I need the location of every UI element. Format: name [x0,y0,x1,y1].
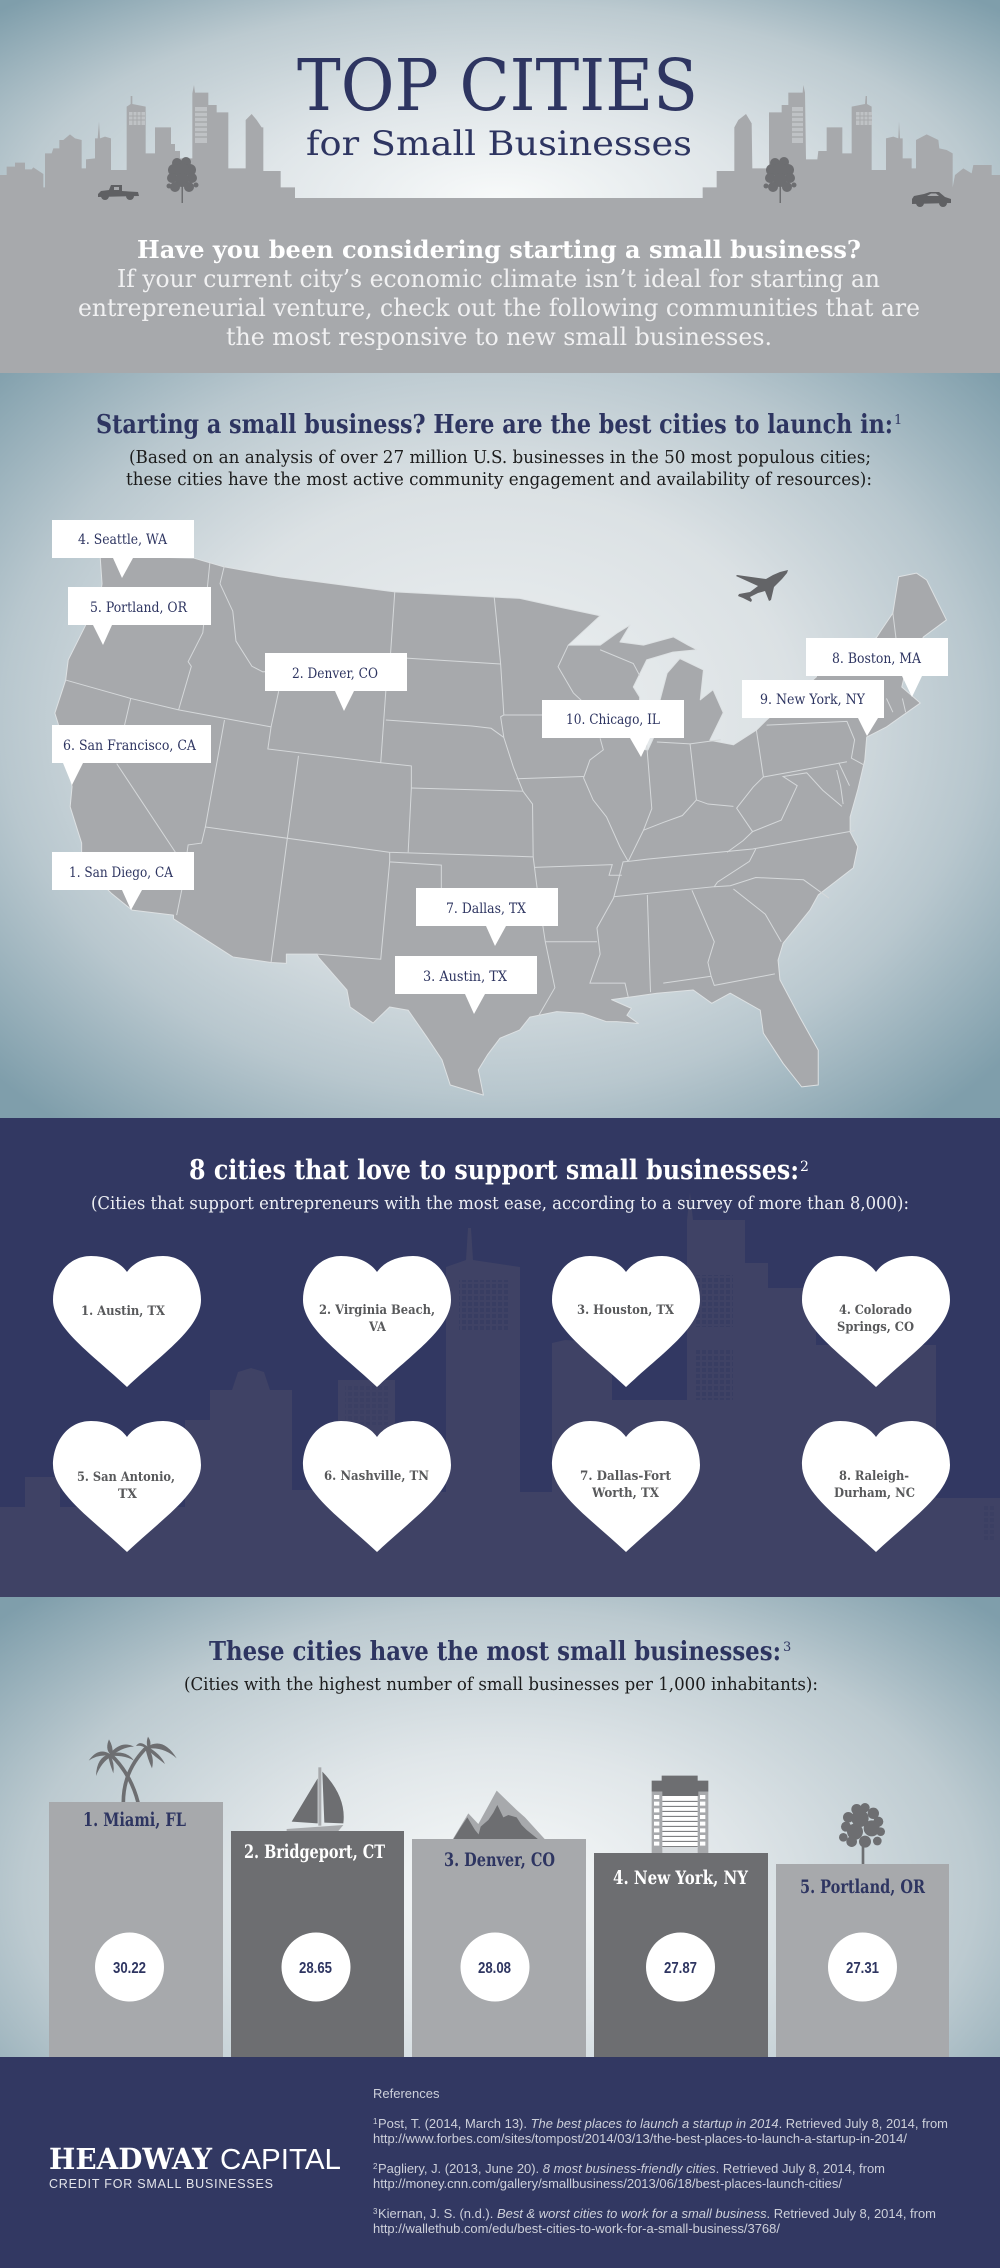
heart: 7. Dallas-Fort Worth: Worth, TX [591,1486,660,1501]
bar: Bridgeport: 2. Bridgeport, CT [244,1841,385,1863]
callout: 4. Seattle: 4. Seattle, WA [78,532,168,548]
reference 2: Pagliery, J. (2013, June 20). 8 most business-friendly cities. Retrieved July 8, 2014, from [378,2161,885,2176]
reference 2 [373,2161,885,2191]
callout: 9. New York: 9. New York, NY [760,692,866,708]
icon: right tree [764,157,796,203]
bar: Portland: 27.31 [846,1960,879,1977]
heart: 3. Houston [552,1256,700,1387]
callout: 3. Austin [395,956,537,1014]
heart: 7. Dallas-Fort Worth: 7. Dallas-Fort [580,1469,671,1484]
callout: 10. Chicago [542,700,684,757]
heart: 8. Raleigh-Durham: Durham, NC [834,1486,915,1501]
icon: sailboat [287,1767,344,1831]
heart: 5. San Antonio: 5. San Antonio, [77,1470,175,1485]
callout: 1. San Diego: 1. San Diego, CA [69,865,174,881]
heart: 8. Raleigh-Durham: 8. Raleigh- [839,1469,909,1484]
icon: left tree [166,157,198,203]
intro question: Have you been considering starting a small business? [137,235,861,264]
logo: Headway Capital: CAPITAL [220,2144,341,2176]
intro text [78,235,920,351]
panel: footer [0,2057,1000,2268]
logo: Headway Capital [49,2142,341,2191]
reference 1: http://www.forbes.com/sites/tompost/2014/03/13/the-best-places-to-launch-a-startup-in-2014/ [373,2131,907,2146]
icon: car [912,192,951,207]
bar: Denver: 28.08 [478,1960,511,1977]
reference 2: http://money.cnn.com/gallery/smallbusiness/2013/06/18/best-places-launch-cities/ [373,2176,842,2191]
bar: New York [594,1853,768,2057]
reference 3 [373,2206,936,2236]
right skyline [703,85,1000,198]
heart: 7. Dallas-Fort Worth [552,1421,700,1552]
bar: Denver: 3. Denver, CO [444,1849,555,1871]
reference 1 [373,2116,948,2146]
callout: 5. Portland [68,587,211,645]
heading: 8 cities: 8 cities that love to support small businesses: [189,1155,799,1186]
bar: Denver [412,1839,586,2057]
background city silhouette [0,1192,1000,1597]
callout: 2. Denver: 2. Denver, CO [292,666,378,682]
callout: 9. New York [742,680,884,736]
references heading: References [373,2086,440,2101]
callout: 1. San Diego [52,852,194,910]
title: TOP CITIES [297,44,698,127]
footnote 2: 2 [800,1159,809,1175]
intro line 1: If your current city’s economic climate isn’t ideal for starting an [117,265,880,293]
heart: 6. Nashville: 6. Nashville, TN [324,1469,429,1484]
bar: Miami: 30.22 [113,1960,146,1977]
callout: 6. San Francisco: 6. San Francisco, CA [63,738,197,754]
left skyline [0,85,295,198]
subtext line 2: these cities have the most active community engagement and availability of resources): [126,469,872,490]
reference 3: Kiernan, J. S. (n.d.). Best & worst cities to work for a small business. Retrieved July 8, 2014, from [378,2206,936,2221]
bar: Bridgeport [231,1831,404,2057]
icon: skyscraper [652,1776,708,1856]
reference 2: 2 [373,2162,378,2171]
callout: 5. Portland: 5. Portland, OR [90,600,187,616]
map: United States [55,556,946,1095]
callout: 4. Seattle [52,520,194,578]
panel: cities with most small businesses [0,1597,1000,2057]
icon: pickup truck [98,185,139,200]
subtitle: for Small Businesses [306,124,692,164]
callout: 7. Dallas: 7. Dallas, TX [446,901,526,917]
subtext: (Cities that support entrepreneurs with the most ease, according to a survey of more than 8,000): [91,1193,909,1214]
heart: 1. Austin: 1. Austin, TX [81,1304,166,1319]
panel: best cities to launch map [0,373,1000,1118]
callout: 8. Boston: 8. Boston, MA [832,651,922,667]
panel: 8 cities that love small businesses [0,1118,1000,1597]
callout: 3. Austin: 3. Austin, TX [423,969,507,985]
heart: 4. Colorado Springs: 4. Colorado [839,1303,912,1318]
heart: 1. Austin [53,1256,201,1387]
callout: 10. Chicago: 10. Chicago, IL [566,712,660,728]
bar: Portland [776,1864,949,2057]
icon: tree [839,1803,885,1865]
heart: 4. Colorado Springs: Springs, CO [837,1320,914,1335]
icon: mountains [453,1791,545,1839]
heart: 2. Virginia Beach: 2. Virginia Beach, [319,1303,435,1318]
footnote 3: 3 [783,1640,791,1655]
grey intro band [0,198,1000,373]
references [373,2086,948,2236]
panel: header with skyline [0,0,1000,373]
heart: 4. Colorado Springs [802,1256,950,1387]
callout: 2. Denver [265,653,407,711]
heart: 5. San Antonio [53,1421,201,1552]
icon: airplane [736,570,788,602]
heart: 2. Virginia Beach: VA [368,1320,387,1335]
icon: palm trees [89,1737,177,1802]
bar: Portland: 5. Portland, OR [800,1876,925,1898]
heart: 2. Virginia Beach [303,1256,451,1387]
bar: New York: 4. New York, NY [613,1867,748,1889]
subtext: (Cities with the highest number of small businesses per 1,000 inhabitants): [184,1674,818,1695]
bar: Miami [49,1802,223,2057]
logo: Headway Capital: CREDIT FOR SMALL BUSINESSES [49,2177,273,2191]
subtext line 1: (Based on an analysis of over 27 million U.S. businesses in the 50 most populous cities; [129,447,871,468]
reference 3: http://wallethub.com/edu/best-cities-to-work-for-a-small-business/3768/ [373,2221,780,2236]
bar: Bridgeport: 28.65 [299,1960,332,1977]
reference 3: 3 [373,2207,378,2216]
logo: Headway Capital: HEADWAY [49,2142,212,2176]
heart: 6. Nashville [303,1421,451,1552]
state borders [66,563,906,1015]
heart: 5. San Antonio: TX [118,1487,138,1502]
bar: Miami: 1. Miami, FL [83,1809,186,1831]
heading: best cities: Starting a small business? Here are the best cities to launch in: [96,410,893,440]
callout: 7. Dallas [416,888,558,946]
heart: 8. Raleigh-Durham [802,1421,950,1552]
footnote 1: 1 [894,413,902,428]
intro line 2: entrepreneurial venture, check out the following communities that are [78,294,920,322]
heading: most small businesses: These cities have the most small businesses: [209,1637,781,1667]
reference 1: Post, T. (2014, March 13). The best places to launch a startup in 2014. Retrieved July 8, 2014, from [378,2116,948,2131]
callout: 6. San Francisco [52,725,211,785]
reference 1: 1 [373,2117,378,2126]
callout: 8. Boston [806,638,948,697]
bar: New York: 27.87 [664,1960,697,1977]
intro line 3: the most responsive to new small businesses. [226,323,772,351]
heart: 3. Houston: 3. Houston, TX [577,1303,675,1318]
